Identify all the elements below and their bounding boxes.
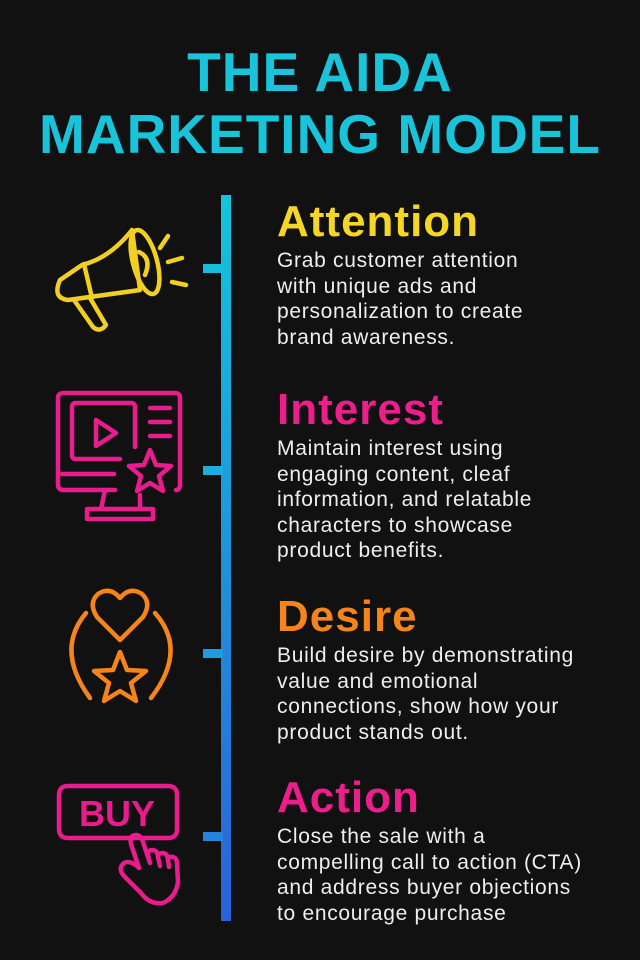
icon: buy button (56, 784, 180, 906)
title: MARKETING MODEL (39, 103, 601, 165)
block: attention: personalization to create (277, 300, 523, 323)
block: interest: information, and relatable (277, 488, 532, 511)
block: desire: Build desire by demonstrating (277, 644, 574, 667)
title (39, 41, 601, 165)
block: interest: engaging content, cleaf (277, 462, 510, 486)
block: attention: Attention (277, 197, 479, 246)
block: desire: value and emotional (277, 670, 478, 692)
block: action (277, 773, 582, 924)
icon: heart star (69, 588, 173, 704)
block: action: and address buyer objections (277, 876, 571, 899)
block: desire (277, 592, 574, 744)
icon: buy button: BUY (79, 793, 155, 834)
block: interest: characters to showcase (277, 514, 513, 536)
block: interest: Interest (277, 385, 444, 434)
title: THE AIDA (187, 41, 453, 103)
block: attention (277, 197, 523, 348)
block: action: Close the sale with a (277, 825, 485, 848)
block: action: compelling call to action (CTA) (277, 850, 582, 874)
block: interest: Maintain interest using (277, 437, 503, 460)
block: attention: brand awareness. (277, 326, 455, 348)
icon: megaphone (55, 228, 188, 332)
block: desire: product stands out. (277, 720, 469, 744)
block: attention: Grab customer attention (277, 249, 518, 272)
block: attention: with unique ads and (277, 274, 477, 298)
block: desire: connections, show how your (277, 695, 559, 718)
block: desire: Desire (277, 592, 418, 641)
icon: monitor (56, 390, 182, 522)
block: interest: product benefits. (277, 539, 444, 562)
block: action: to encourage purchase (277, 902, 507, 924)
block: interest (277, 385, 532, 562)
block: action: Action (277, 773, 420, 822)
